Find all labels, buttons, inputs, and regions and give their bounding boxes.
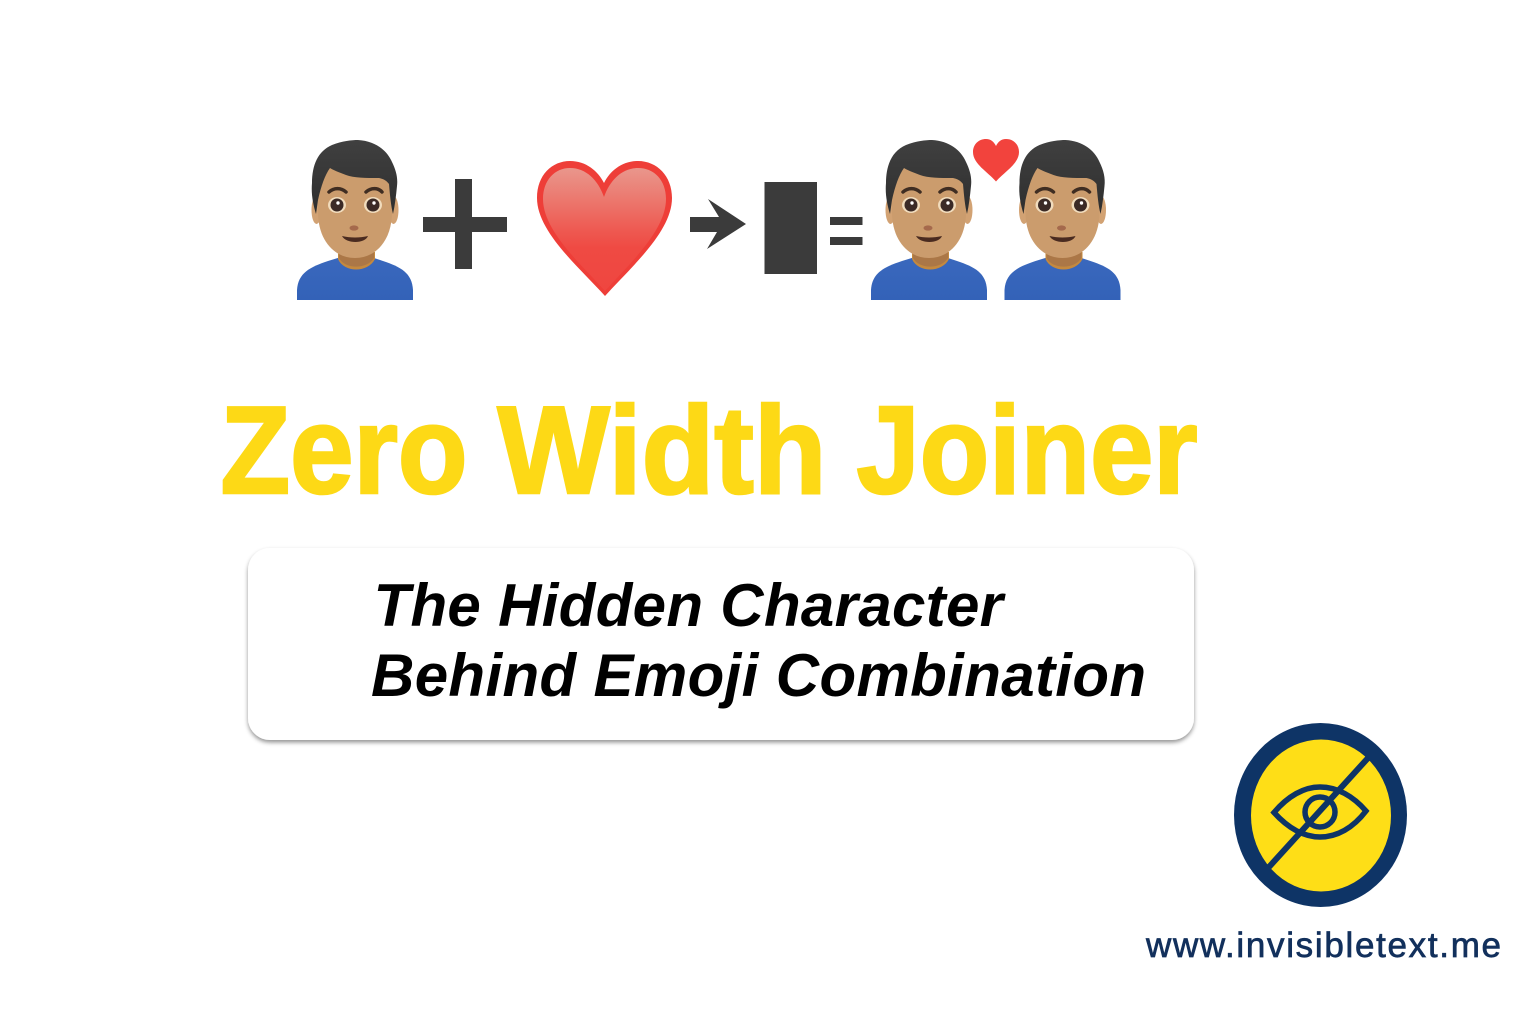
subtitle text: Behind Emoji Combination — [371, 642, 1146, 709]
subtitle text — [371, 572, 1146, 709]
equals sign — [830, 217, 862, 245]
subtitle card — [248, 548, 1194, 740]
small heart — [973, 139, 1019, 182]
logo: crossed-out eye badge — [1234, 723, 1407, 907]
right man — [1004, 140, 1120, 300]
icon: red heart — [537, 161, 672, 296]
title — [220, 382, 1198, 520]
left man — [871, 140, 987, 300]
subtitle text: The Hidden Character — [374, 572, 1007, 639]
website url: www.invisibletext.me — [1145, 926, 1501, 965]
icon: man emoji — [297, 140, 413, 300]
title: Zero — [220, 382, 468, 520]
title: Joiner — [856, 382, 1198, 520]
equation row: man + heart → ZWJ = couple — [297, 139, 1120, 300]
card background — [248, 548, 1194, 740]
icon: couple with heart emoji — [871, 139, 1120, 300]
title: Width — [498, 382, 826, 520]
zero width joiner block — [764, 182, 817, 274]
arrow — [690, 199, 746, 249]
plus sign — [423, 179, 507, 269]
